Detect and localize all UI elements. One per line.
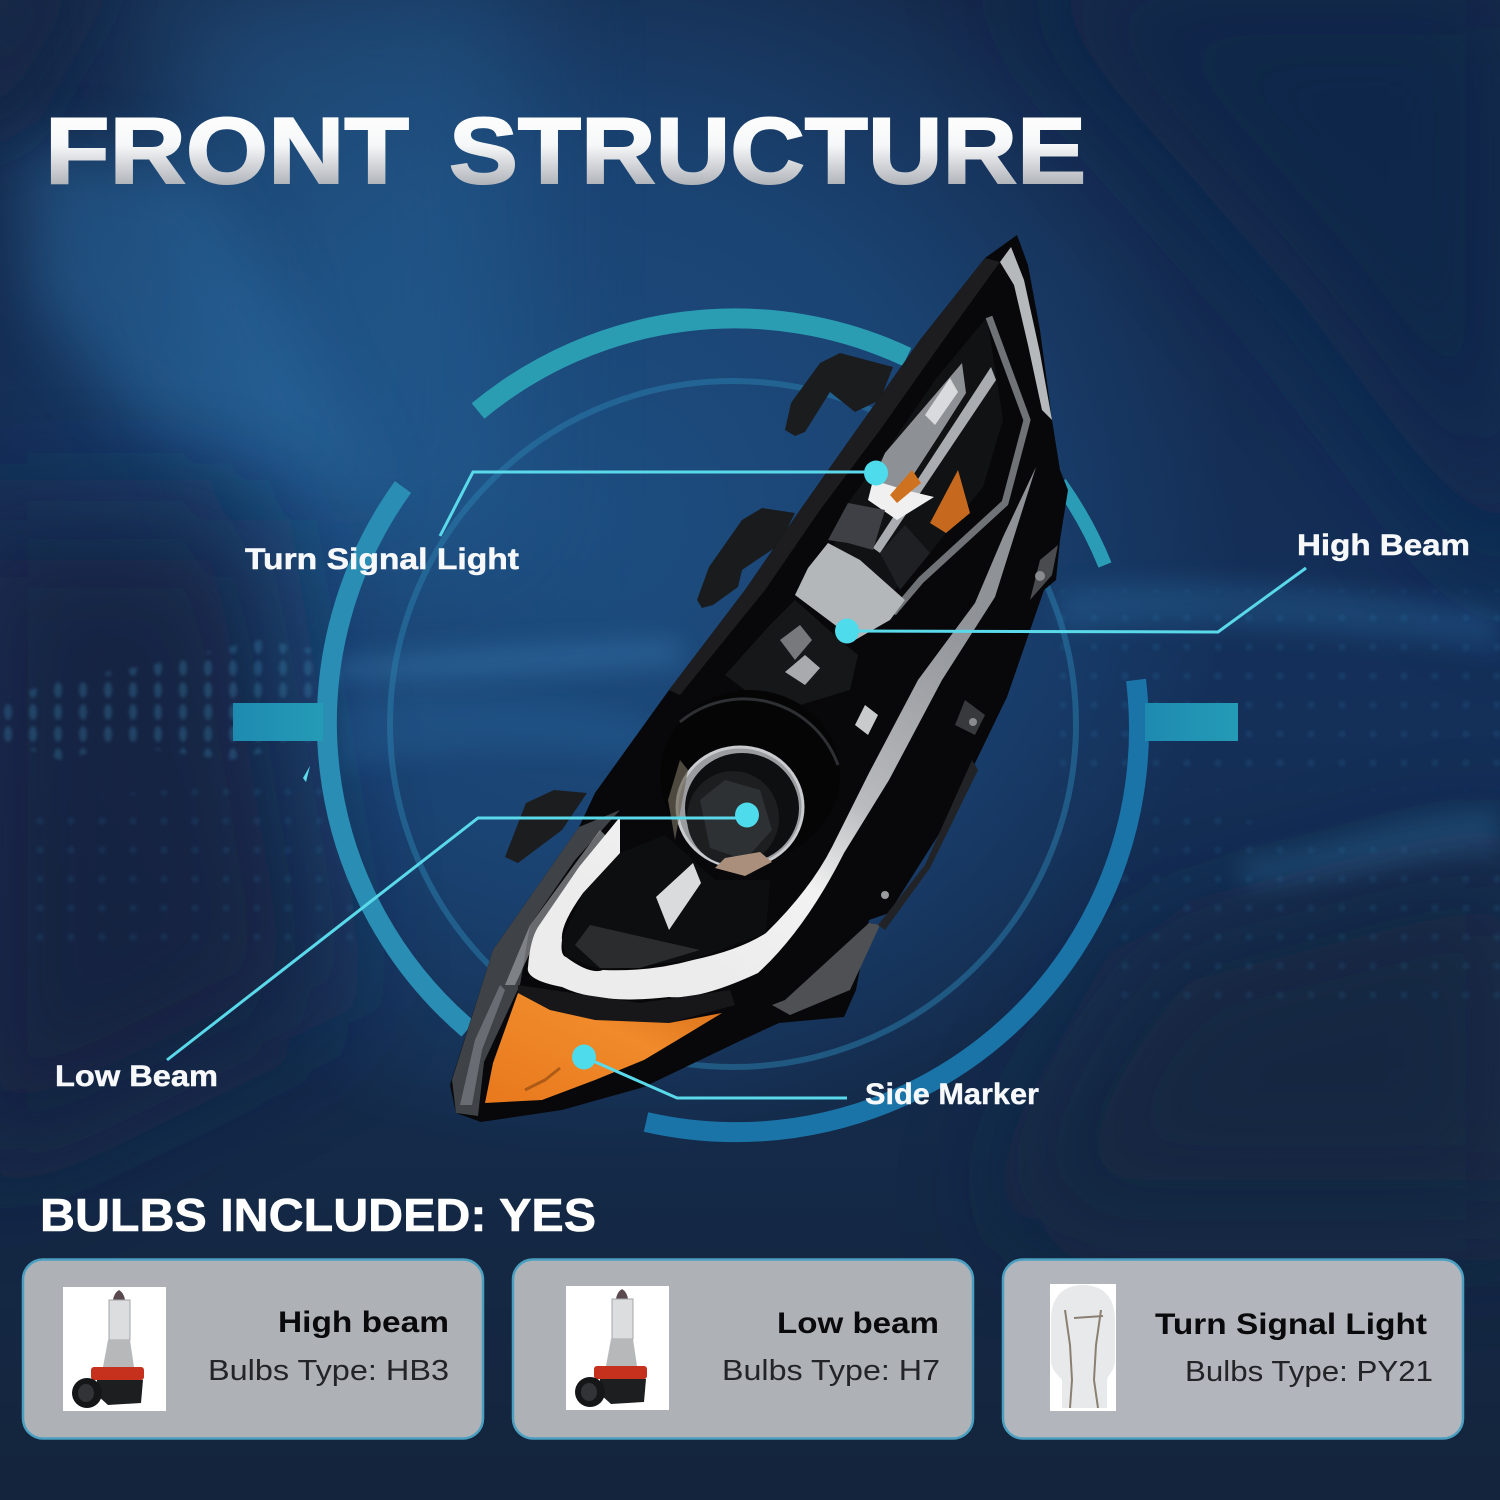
bulb type: Bulbs Type: H7 bbox=[722, 1355, 940, 1387]
middle mounting tab bbox=[697, 508, 795, 608]
callout: high beam: High Beam bbox=[1297, 529, 1470, 562]
bulb type: Bulbs Type: HB3 bbox=[208, 1355, 449, 1387]
background dot wave bbox=[0, 582, 1500, 1010]
outer arc right lower bbox=[646, 680, 1139, 1132]
icon: halogen bulb bbox=[63, 1287, 166, 1411]
callout: side marker bbox=[572, 1044, 1039, 1111]
card: high beam bulb bbox=[23, 1260, 483, 1438]
bulb name: Low beam bbox=[777, 1307, 939, 1340]
callout: turn signal light: Turn Signal Light bbox=[245, 543, 519, 576]
flange bbox=[669, 258, 1000, 695]
clear outer lens lower left bbox=[452, 810, 620, 1116]
callout: turn signal light bbox=[245, 460, 888, 576]
turn signal dark lower bbox=[828, 503, 885, 550]
outer arc top bbox=[478, 318, 907, 411]
card: low beam bulb bbox=[513, 1260, 973, 1438]
callout: low beam bbox=[55, 802, 759, 1093]
callout: low beam: Low Beam bbox=[55, 1060, 218, 1093]
outer housing sheen bbox=[1000, 247, 1052, 420]
black band above marker bbox=[518, 985, 735, 1023]
icon: wedge bulb bbox=[1050, 1284, 1116, 1411]
chrome light strip bbox=[528, 467, 1036, 999]
upper chrome curve bbox=[893, 317, 1027, 613]
title: STRUCTURE bbox=[449, 98, 1086, 203]
turn signal housing bbox=[825, 317, 1003, 630]
bulb name: Turn Signal Light bbox=[1155, 1308, 1427, 1341]
concentric ring graphic bbox=[327, 318, 1139, 1132]
amber side marker bbox=[485, 993, 722, 1103]
left crosshair bar bbox=[233, 703, 323, 741]
title bbox=[45, 98, 1086, 203]
lower mounting tab bbox=[505, 790, 587, 863]
heading: bulbs included: BULBS INCLUDED: YES bbox=[40, 1189, 596, 1241]
upper mounting tab bbox=[785, 353, 893, 436]
high beam lens bbox=[795, 543, 905, 640]
outer arc left bbox=[327, 487, 468, 1029]
headlight bbox=[450, 235, 1068, 1122]
bright patch bbox=[868, 480, 934, 520]
mesh strip bbox=[873, 367, 996, 553]
turn signal amber reflection bbox=[930, 470, 970, 533]
outer arc right upper bbox=[1060, 483, 1105, 565]
bulb chamber bbox=[725, 600, 858, 705]
callout: side marker: Side Marker bbox=[865, 1078, 1039, 1111]
title: FRONT bbox=[45, 98, 409, 203]
bulb type: Bulbs Type: PY21 bbox=[1185, 1356, 1433, 1388]
icon: halogen bulb bbox=[566, 1286, 669, 1410]
projector lens bbox=[668, 747, 803, 876]
callout: high beam bbox=[835, 529, 1470, 644]
right crosshair bar bbox=[1145, 703, 1238, 741]
rear bracket with screw bbox=[1030, 545, 1058, 600]
lamp body bbox=[450, 235, 1068, 1122]
inner ring bbox=[390, 381, 1076, 1067]
turn signal reflector bbox=[873, 363, 966, 500]
card: turn signal bulb bbox=[1003, 1260, 1463, 1438]
bulb name: High beam bbox=[278, 1306, 449, 1339]
small mark bbox=[303, 766, 310, 782]
rear side trim bbox=[772, 923, 880, 1015]
low beam bezel bbox=[562, 835, 770, 970]
projector shroud bbox=[660, 690, 840, 860]
